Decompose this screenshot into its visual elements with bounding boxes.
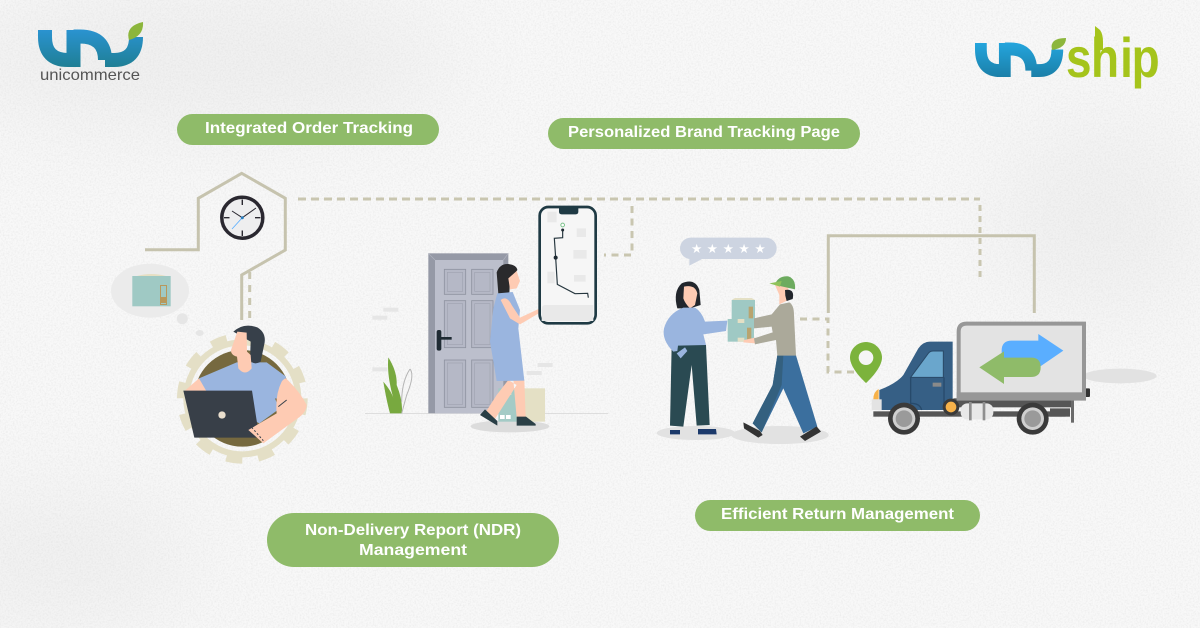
cargo box	[957, 324, 1086, 400]
rating speech bubble	[680, 238, 777, 266]
floor shadow	[471, 420, 549, 432]
heading pill: Integrated Order Tracking: Integrated Order Tracking	[205, 120, 413, 137]
illustration: parcel handover	[657, 238, 829, 444]
heading pill: Personalized Brand Tracking Page: Personalized Brand Tracking Page	[568, 124, 840, 141]
illustration: person with laptop in gear	[180, 326, 307, 460]
connector: solid truck frame line	[828, 236, 1034, 313]
rating speech bubble: ★	[723, 241, 734, 256]
chassis	[873, 388, 1090, 423]
wheels	[888, 403, 1049, 435]
shadows	[657, 426, 829, 444]
connector: dashed routes	[250, 199, 980, 372]
hair	[233, 326, 265, 363]
floor line	[365, 412, 608, 414]
heading pill: Non-Delivery Report (NDR) Management: Non-Delivery Report (NDR)	[305, 522, 521, 539]
laptop	[183, 391, 259, 438]
parcels	[728, 298, 755, 342]
woman shoes	[480, 409, 536, 426]
phone	[540, 207, 596, 323]
fuel tank	[961, 402, 993, 420]
door	[428, 253, 508, 413]
woman face	[508, 271, 520, 289]
logo: uniship	[981, 26, 1160, 89]
wall bricks	[372, 308, 553, 375]
left arm	[185, 378, 207, 392]
logo: unicommerce: unicommerce	[40, 67, 140, 84]
face and neck	[231, 332, 252, 372]
logo: uniship: ship	[1066, 27, 1160, 89]
courier	[743, 276, 821, 441]
rating speech bubble: ★	[738, 241, 750, 256]
woman dress	[490, 292, 524, 381]
icon: clock	[222, 197, 263, 238]
gear	[180, 336, 304, 460]
location pin	[850, 342, 882, 383]
truck shadow	[1083, 369, 1157, 383]
woman legs	[486, 380, 526, 419]
logo: unicommerce	[40, 22, 143, 84]
heading pill: Personalized Brand Tracking Page	[548, 118, 860, 149]
heading pill: Non-Delivery Report (NDR) Management	[267, 513, 559, 567]
connector: solid hexagon line	[145, 173, 285, 320]
heading pill: Efficient Return Management: Efficient Return Management	[721, 506, 955, 523]
cab	[872, 342, 959, 415]
illustration: return truck	[850, 324, 1157, 435]
heading pill: Non-Delivery Report (NDR) Management: Management	[359, 542, 468, 559]
woman arm	[501, 298, 553, 324]
plant	[383, 357, 412, 413]
right arm	[248, 378, 307, 443]
customer	[664, 282, 727, 434]
illustration: woman at door with phone	[365, 207, 608, 432]
heading pill: Integrated Order Tracking	[177, 114, 439, 145]
shirt	[199, 362, 286, 423]
return arrows	[979, 334, 1063, 384]
parcels	[498, 388, 545, 422]
rating speech bubble: ★	[754, 241, 766, 256]
heading pill: Efficient Return Management	[695, 500, 980, 531]
rating speech bubble: ★	[691, 241, 702, 256]
icon: thought bubble with parcel	[111, 264, 204, 336]
woman hair	[497, 264, 517, 294]
rating speech bubble: ★	[707, 241, 718, 256]
